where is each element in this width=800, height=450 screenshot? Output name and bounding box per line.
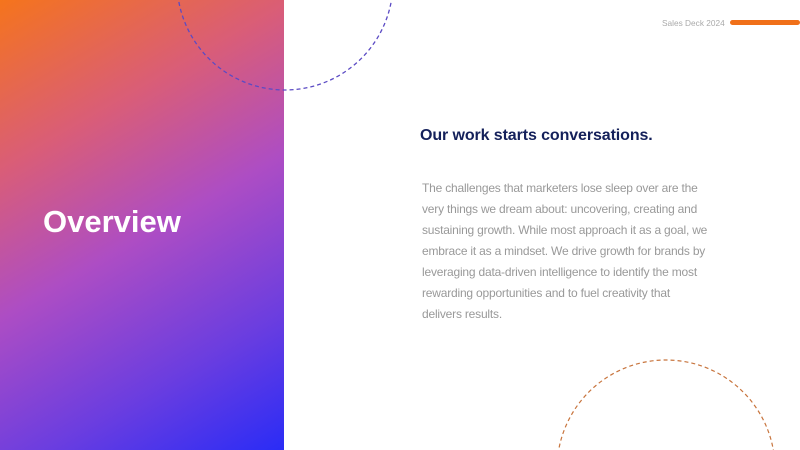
body text: delivers results.: [422, 307, 502, 321]
panel: gradient left: [0, 0, 284, 450]
header accent bar: [730, 20, 800, 25]
header label: Sales Deck 2024: [662, 18, 725, 28]
body text: sustaining growth. While most approach it as a goal, we: [422, 223, 707, 237]
body text: leveraging data-driven intelligence to identify the most: [422, 265, 697, 279]
body text: [422, 181, 707, 321]
heading: Overview: Overview: [43, 204, 181, 239]
body text: embrace it as a mindset. We drive growth for brands by: [422, 244, 705, 258]
body text: The challenges that marketers lose sleep over are the: [422, 181, 698, 195]
subheading: Our work starts conversations.: [420, 127, 653, 144]
body text: very things we dream about: uncovering, creating and: [422, 202, 697, 216]
body text: rewarding opportunities and to fuel creativity that: [422, 286, 670, 300]
